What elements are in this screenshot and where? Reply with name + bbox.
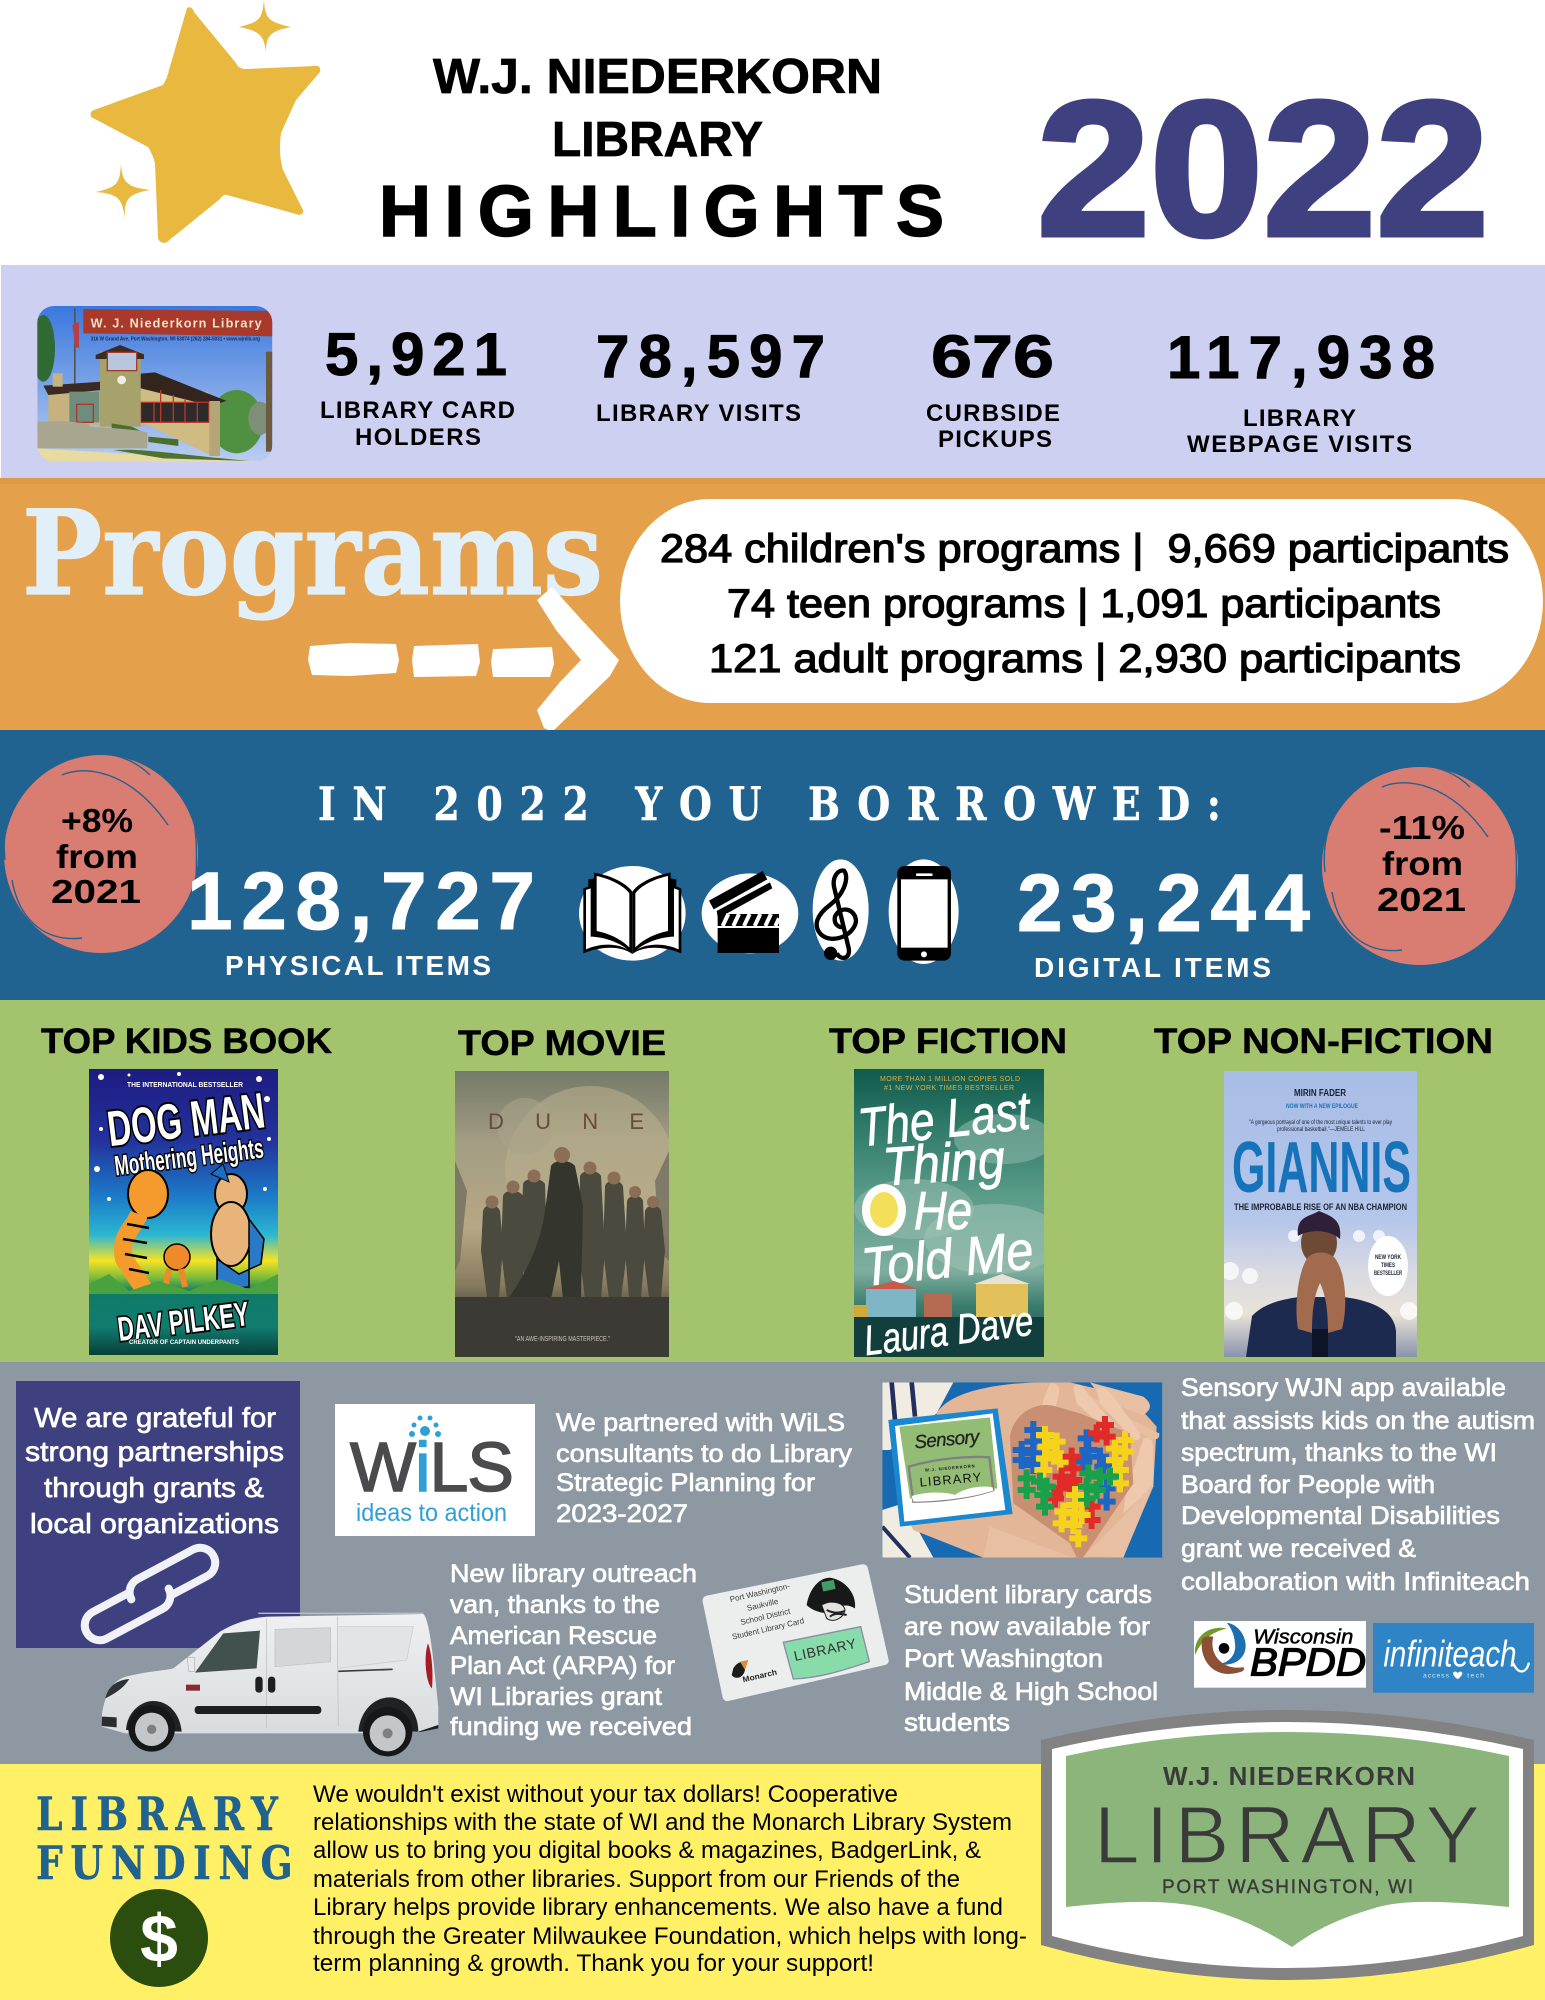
text: outreach van: WI Libraries grant xyxy=(450,1683,662,1711)
text: student cards: Student library cards xyxy=(904,1581,1152,1609)
book cover: The Last Thing He Told Me: Told Me xyxy=(859,1220,1036,1298)
title xyxy=(379,50,944,252)
logo: WiLS: WiLS xyxy=(350,1428,514,1506)
book cover: Dog Man: Mothering Heights xyxy=(113,1132,265,1181)
book cover: Dog Man: DOG MAN xyxy=(104,1082,268,1157)
stat: webpage visits: WEBPAGE VISITS xyxy=(1187,431,1412,458)
mini sensory card xyxy=(888,1408,1013,1527)
logo: Wisconsin BPDD: Wisconsin xyxy=(1253,1625,1353,1648)
stat: library card holders xyxy=(320,321,515,451)
year 2022: 2022 xyxy=(1037,61,1489,276)
image: student library card: Port Washington- xyxy=(729,1581,791,1604)
panel: library stats xyxy=(1,265,1545,478)
book cover: Giannis: MIRIN FADER xyxy=(1294,1088,1347,1099)
text: sensory app: Sensory WJN app available xyxy=(1181,1374,1506,1402)
text: sensory app: Board for People with xyxy=(1181,1471,1435,1499)
book cover: Giannis: NOW WITH A NEW EPILOGUE xyxy=(1286,1103,1359,1110)
stat: library visits: 78,597 xyxy=(596,323,825,390)
text: sensory app: grant we received & xyxy=(1181,1535,1416,1563)
badge: +8% from 2021 xyxy=(4,754,198,953)
book cover: Giannis: GIANNIS xyxy=(1232,1128,1411,1208)
logo: library badge xyxy=(1041,1710,1534,1980)
book cover: Dog Man: CREATOR OF CAPTAIN UNDERPANTS xyxy=(129,1339,240,1346)
icon: gold star with sparkles xyxy=(91,0,320,243)
callout: program counts: 284 children's programs | 9,669 participants xyxy=(660,527,1509,571)
logo: infiniteach xyxy=(1373,1623,1534,1693)
logo: infiniteach: access xyxy=(1423,1672,1450,1679)
heading: top movie: TOP MOVIE xyxy=(458,1024,666,1063)
callout: program counts xyxy=(620,499,1543,703)
icon: treble clef xyxy=(813,859,869,961)
text: funding description: term planning & growth. Thank you for your support! xyxy=(313,1950,874,1977)
text: student cards xyxy=(904,1581,1158,1737)
photo: library building: 316 W Grand Ave, Port Washington, WI 53074 (262) 284-5031 • www.wjnlib.org xyxy=(91,337,260,343)
badge: -11% from 2021: -11% xyxy=(1379,809,1465,846)
text: funding description: Library helps provide library enhancements. We also have a fund xyxy=(313,1894,1003,1921)
stat: digital items: 23,244 xyxy=(1017,858,1310,949)
panel: top titles xyxy=(0,1000,1545,1364)
stat: library card holders: HOLDERS xyxy=(355,424,481,451)
stat: library card holders: LIBRARY CARD xyxy=(320,397,515,424)
logo: infiniteach: tech xyxy=(1467,1672,1484,1679)
stat: curbside pickups: CURBSIDE xyxy=(926,400,1060,427)
book cover: Giannis: "A gorgeous portrayal of one of the most unique talents to ever play xyxy=(1249,1120,1392,1126)
logo: WiLS xyxy=(335,1404,535,1536)
text: student cards: Middle & High School xyxy=(904,1678,1158,1706)
logo: library badge: PORT WASHINGTON, WI xyxy=(1162,1877,1413,1898)
book cover: The Last Thing He Told Me: Laura Dave xyxy=(861,1297,1036,1364)
stat: library visits: LIBRARY VISITS xyxy=(596,400,801,427)
stat: physical items: PHYSICAL ITEMS xyxy=(225,950,491,981)
card: grateful for partnerships: strong partnerships xyxy=(25,1436,284,1467)
stat: curbside pickups: PICKUPS xyxy=(938,426,1052,453)
movie poster: Dune: D U N E xyxy=(488,1109,644,1134)
icon: chain link xyxy=(76,1542,224,1646)
text: sensory app: that assists kids on the autism xyxy=(1181,1407,1535,1435)
badge: -11% from 2021: 2021 xyxy=(1377,881,1466,918)
book cover: The Last Thing He Told Me: Thing xyxy=(881,1129,1007,1198)
stat: digital items: DIGITAL ITEMS xyxy=(1034,952,1271,983)
card: grateful for partnerships: through grants & xyxy=(44,1472,264,1503)
text: student cards: are now available for xyxy=(904,1613,1150,1641)
card: grateful for partnerships xyxy=(16,1381,300,1648)
logo: Wisconsin BPDD: BPDD xyxy=(1250,1641,1366,1685)
text: sensory app: collaboration with Infiniteach xyxy=(1181,1568,1530,1596)
text: WiLS partnership: We partnered with WiLS xyxy=(556,1409,845,1437)
stat: curbside pickups xyxy=(926,323,1060,453)
panel: programs xyxy=(0,478,1545,732)
image: student library card: Saukville xyxy=(746,1597,780,1613)
puzzle pieces xyxy=(1013,1421,1116,1511)
badge: +8% from 2021: from xyxy=(56,838,138,875)
book cover: Giannis: THE IMPROBABLE RISE OF AN NBA CHAMPION xyxy=(1234,1202,1407,1212)
book cover: Giannis: professional basketball."—JEMELE HILL xyxy=(1277,1127,1366,1133)
text: funding description xyxy=(313,1781,1027,1977)
title: W.J. NIEDERKORN xyxy=(433,50,882,104)
mini sensory card: LIBRARY xyxy=(919,1470,982,1490)
icon: dollar coin: $ xyxy=(140,1901,178,1977)
stat: webpage visits: LIBRARY xyxy=(1243,405,1356,432)
text: WiLS partnership: 2023-2027 xyxy=(556,1500,688,1528)
image: student library card: Monarch xyxy=(742,1668,778,1684)
book cover: Giannis xyxy=(1221,1071,1418,1357)
text: funding description: materials from other libraries. Support from our Friends of the xyxy=(313,1866,960,1893)
text: WiLS partnership: Strategic Planning for xyxy=(556,1469,815,1497)
book cover: Dog Man: DAV PILKEY xyxy=(116,1295,251,1349)
book cover: The Last Thing He Told Me: #1 NEW YORK TIMES BESTSELLER xyxy=(884,1085,1014,1092)
logo: library badge: W.J. NIEDERKORN xyxy=(1163,1761,1415,1791)
text: funding description: through the Greater Milwaukee Foundation, which helps with long- xyxy=(313,1923,1027,1950)
stat: library visits xyxy=(596,323,825,427)
card: grateful for partnerships: We are grateful for xyxy=(34,1402,276,1433)
mini sensory card: W.J. NIEDERKORN xyxy=(925,1463,975,1473)
book cover: The Last Thing He Told Me: MORE THAN 1 MILLION COPIES SOLD xyxy=(880,1076,1020,1083)
hands xyxy=(900,1382,1159,1558)
logo: WiLS: ideas to action xyxy=(356,1499,507,1527)
book cover: The Last Thing He Told Me: The Last xyxy=(855,1080,1034,1158)
icons: book, clapperboard, treble clef, phone xyxy=(579,859,959,964)
badge: -11% from 2021 xyxy=(1322,766,1518,965)
stat: physical items: 128,727 xyxy=(187,856,535,947)
book cover: Dog Man: THE INTERNATIONAL BESTSELLER xyxy=(127,1082,243,1089)
icon: clapperboard xyxy=(702,871,798,953)
title: HIGHLIGHTS xyxy=(379,172,944,252)
panel: borrowing xyxy=(0,730,1545,1000)
photo: outreach van xyxy=(102,1613,438,1756)
image: student library card: LIBRARY xyxy=(792,1635,858,1664)
heading: top non-fiction: TOP NON-FICTION xyxy=(1154,1022,1493,1061)
text: WiLS partnership xyxy=(556,1409,853,1528)
title: LIBRARY xyxy=(552,113,763,167)
text: outreach van: American Rescue xyxy=(450,1622,657,1650)
heading: Programs: Programs xyxy=(22,484,603,622)
book cover: Giannis: BESTSELLER xyxy=(1374,1271,1402,1277)
book cover: Giannis: NEW YORK xyxy=(1375,1255,1402,1261)
text: WiLS partnership: consultants to do Library xyxy=(556,1440,853,1468)
badge: +8% from 2021: +8% xyxy=(61,802,133,839)
callout: program counts: 121 adult programs | 2,930 participants xyxy=(709,637,1461,681)
icon: dollar coin xyxy=(110,1889,208,1987)
text: funding description: allow us to bring you digital books & magazines, BadgerLink, & xyxy=(313,1837,981,1864)
text: sensory app: Developmental Disabilities xyxy=(1181,1502,1500,1530)
icon: open book xyxy=(579,866,686,961)
text: sensory app: spectrum, thanks to the WI xyxy=(1181,1439,1497,1467)
text: funding description: relationships with the state of WI and the Monarch Library System xyxy=(313,1809,1012,1836)
heading: library funding xyxy=(36,1787,293,1890)
heading: library funding: FUNDING xyxy=(36,1836,293,1890)
photo: library building xyxy=(32,306,272,462)
text: outreach van: New library outreach xyxy=(450,1560,697,1588)
panel: library funding xyxy=(0,1764,1545,2000)
image: student library card: School District xyxy=(739,1607,792,1627)
photo: library building: W. J. Niederkorn Library xyxy=(91,316,262,330)
heading: top fiction: TOP FICTION xyxy=(829,1022,1067,1061)
callout: program counts: 74 teen programs | 1,091 participants xyxy=(727,582,1441,626)
book cover: The Last Thing He Told Me xyxy=(854,1069,1044,1357)
photo: sensory puzzle heart xyxy=(882,1382,1162,1558)
logo: Wisconsin BPDD xyxy=(1194,1621,1366,1688)
text: student cards: students xyxy=(904,1709,1010,1737)
movie poster: Dune xyxy=(455,1071,675,1357)
icon: phone xyxy=(889,859,959,964)
book cover: The Last Thing He Told Me: He xyxy=(914,1181,972,1241)
text: outreach van xyxy=(450,1560,697,1741)
mini sensory card: Sensory xyxy=(914,1426,982,1452)
stat: webpage visits xyxy=(1167,324,1435,458)
badge: +8% from 2021: 2021 xyxy=(51,873,141,910)
image: student library card xyxy=(703,1564,889,1701)
header background xyxy=(0,0,1545,265)
heading: top kids book: TOP KIDS BOOK xyxy=(41,1022,332,1061)
stat: curbside pickups: 676 xyxy=(931,323,1054,390)
stat: webpage visits: 117,938 xyxy=(1167,324,1435,391)
book cover: Dog Man xyxy=(89,1069,278,1355)
logo: library badge: LIBRARY xyxy=(1094,1790,1480,1881)
text: student cards: Port Washington xyxy=(904,1645,1103,1673)
card: grateful for partnerships: local organizations xyxy=(30,1508,279,1539)
book cover: Giannis: TIMES xyxy=(1381,1263,1395,1269)
text: outreach van: van, thanks to the xyxy=(450,1591,660,1619)
image: student library card: Student Library Card xyxy=(731,1616,805,1642)
heading: library funding: LIBRARY xyxy=(36,1787,279,1841)
text: sensory app xyxy=(1181,1374,1535,1596)
stat: library card holders: 5,921 xyxy=(325,321,507,388)
text: outreach van: Plan Act (ARPA) for xyxy=(450,1652,675,1680)
arrow: dashed brush arrow xyxy=(308,587,619,732)
text: funding description: We wouldn't exist without your tax dollars! Cooperative xyxy=(313,1781,898,1808)
text: outreach van: funding we received xyxy=(450,1713,692,1741)
panel: partnerships xyxy=(0,1362,1545,1764)
badge: -11% from 2021: from xyxy=(1382,845,1463,882)
movie poster: Dune: "AN AWE-INSPIRING MASTERPIECE." xyxy=(515,1336,610,1343)
heading: in 2022 you borrowed: IN 2022 YOU BORROWED: xyxy=(318,777,1221,831)
